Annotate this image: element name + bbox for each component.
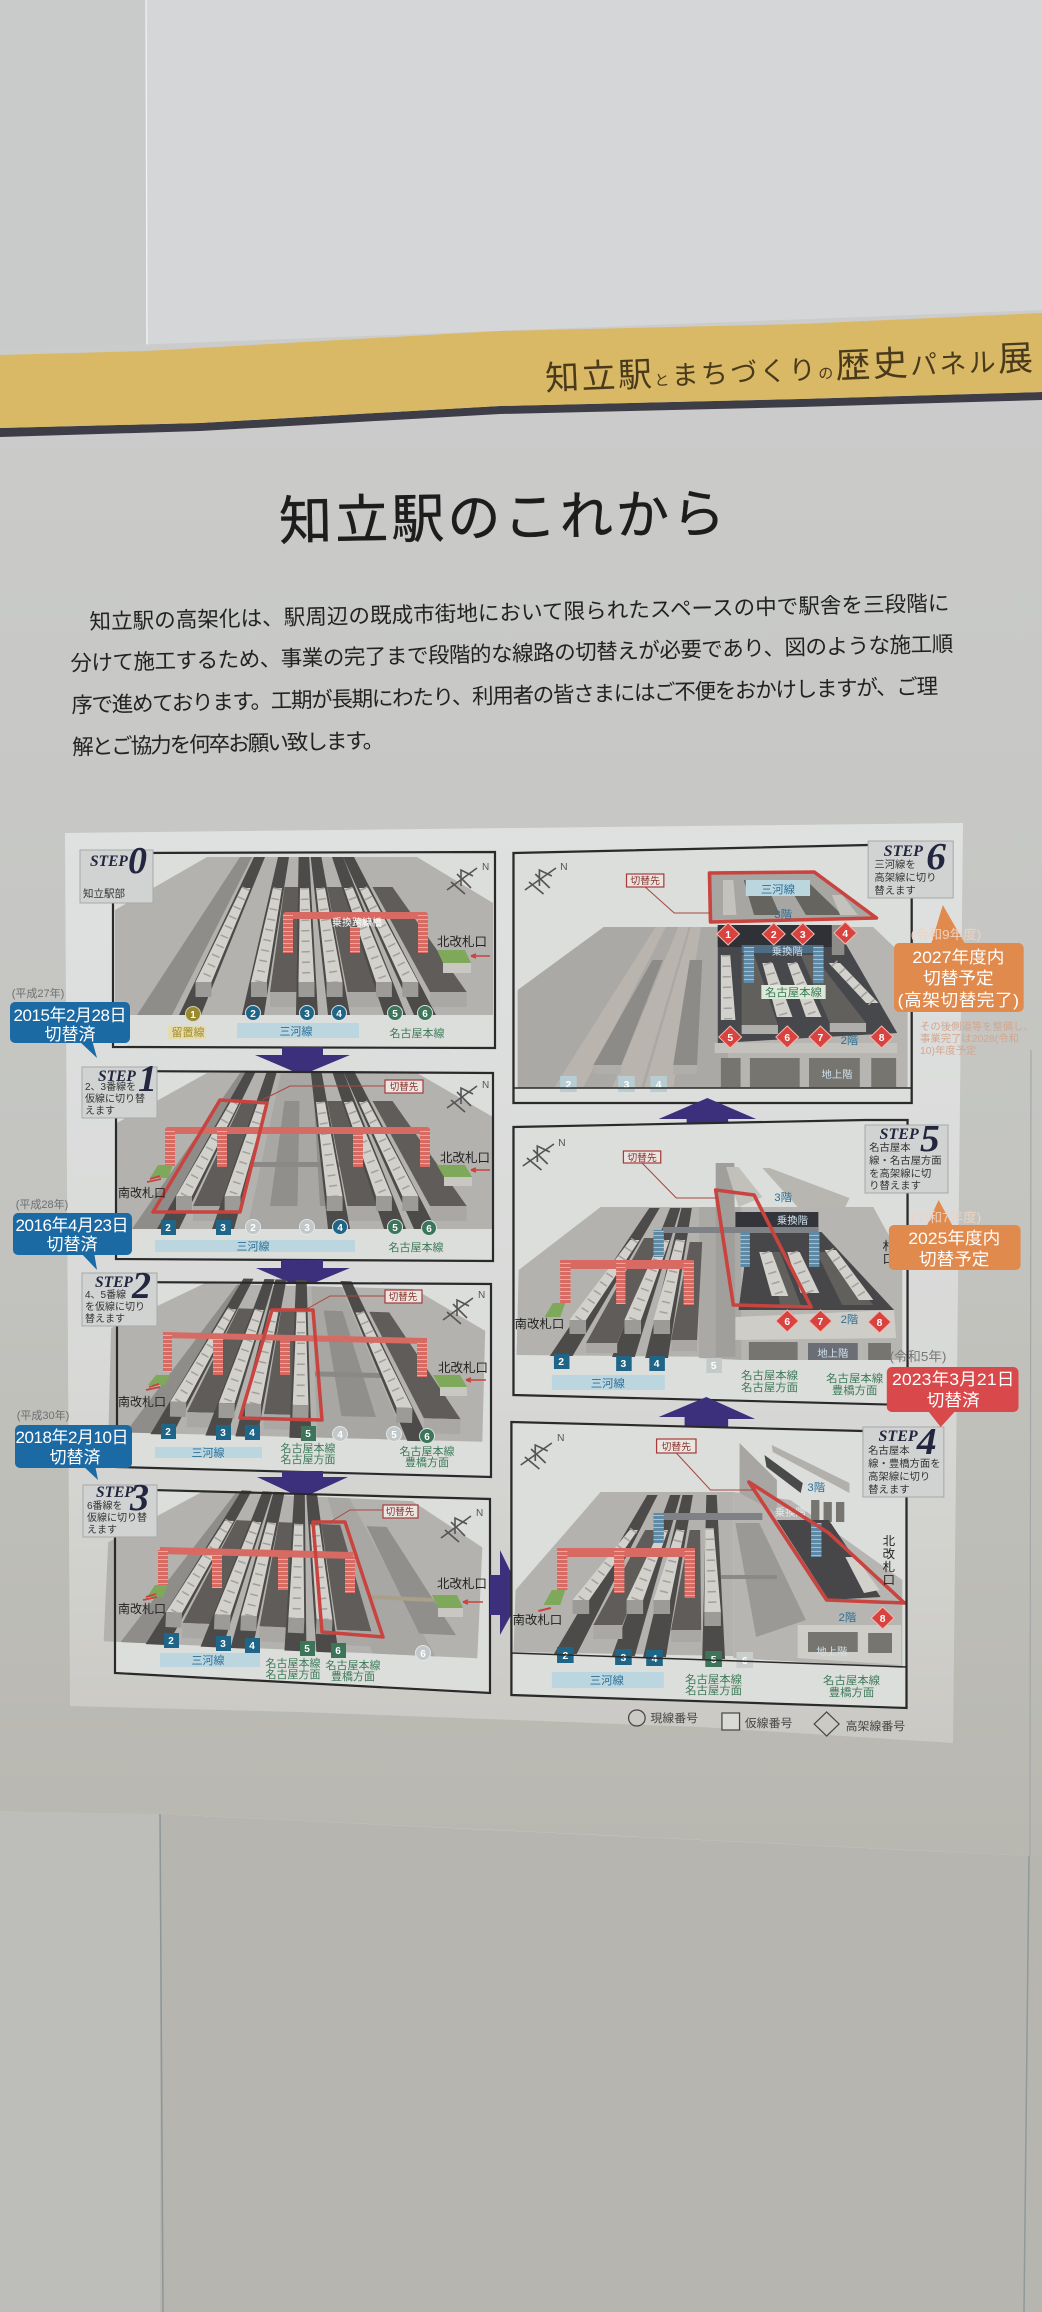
line names: 豊橋方面 xyxy=(829,1685,874,1699)
compass xyxy=(443,1290,485,1324)
line numbers xyxy=(164,1633,430,1660)
body text: 知立駅の高架化は、駅周辺の既成市街地において限られたスペースの中で駅舎を三段階に xyxy=(89,591,950,634)
target callout: 切替先 xyxy=(390,1081,419,1093)
step label: 高架線に切り xyxy=(868,1470,930,1483)
line names: 名古屋方面 xyxy=(280,1452,336,1466)
elevated numbers and floors: 6 xyxy=(784,1317,790,1328)
arrow: step 4 to 5 xyxy=(659,1397,755,1427)
arrow: step 1 to 2 xyxy=(256,1260,350,1288)
floor labels xyxy=(821,1034,858,1081)
line names: 三河線 xyxy=(280,1025,312,1038)
line numbers xyxy=(557,1647,753,1668)
line numbers: 5 xyxy=(305,1429,311,1440)
line numbers: 2 xyxy=(165,1427,171,1438)
step label: 三河線を xyxy=(874,858,916,871)
line numbers: 6 xyxy=(424,1432,430,1443)
elevated structure xyxy=(740,1443,901,1665)
compass xyxy=(523,1138,566,1170)
step label: STEP xyxy=(880,1126,919,1143)
target highlight box xyxy=(153,1100,267,1212)
step label: 仮線に切り替 xyxy=(85,1092,145,1105)
ground and tracks xyxy=(517,1207,902,1360)
line names: 豊橋方面 xyxy=(832,1383,877,1397)
line numbers: 2 xyxy=(250,1223,256,1234)
target highlight box xyxy=(313,1522,383,1637)
gates: 北改札口 xyxy=(440,1150,490,1165)
step label xyxy=(80,840,153,903)
callout: 2018 xyxy=(15,1408,132,1480)
white diagram sheet xyxy=(65,823,963,1743)
line numbers: 4 xyxy=(654,1359,660,1370)
overpass xyxy=(165,1127,430,1167)
line numbers: 2 xyxy=(562,1651,569,1662)
target callout xyxy=(627,874,711,913)
panel: STEP 2 xyxy=(82,1265,491,1477)
step label xyxy=(82,1058,157,1118)
line names: 名古屋本線 xyxy=(388,1240,444,1254)
elevated line numbers: 1 xyxy=(725,930,731,941)
north gate: 北改札口 xyxy=(437,934,487,949)
crossing walkway xyxy=(370,1595,433,1602)
step label: り替えます xyxy=(869,1179,921,1192)
old track scene xyxy=(518,927,908,1088)
step label: 替えます xyxy=(85,1312,125,1325)
overpass: 乗換跨線橋 xyxy=(332,916,382,929)
arrow: step 0 to 1 xyxy=(255,1047,350,1075)
panel: STEP 4 xyxy=(511,1422,944,1708)
compass: N xyxy=(478,1290,485,1301)
body text: 分けて施工するため、事業の完了まで段階的な線路の切替えが必要であり、図のような施工順 xyxy=(70,632,953,676)
elevated numbers and floors xyxy=(816,1607,894,1658)
gates: 北改札口 xyxy=(437,1576,487,1591)
callout: 2027: 切替予定 xyxy=(923,968,994,988)
line names xyxy=(160,1653,380,1683)
line names: 名古屋本線 xyxy=(685,1672,742,1686)
line name: Nagoya main: 名古屋本線 xyxy=(765,985,822,999)
step label: 0 xyxy=(128,840,147,882)
gates: 口 xyxy=(883,1573,895,1587)
arrow: step 3 to 4 xyxy=(490,1550,522,1635)
banner xyxy=(0,313,1042,437)
elevated numbers and floors: 地上階 xyxy=(816,1645,847,1658)
track scene xyxy=(104,1484,484,1659)
panel: STEP 6 xyxy=(513,837,953,1103)
line numbers xyxy=(554,1354,722,1373)
floor labels: 地上階 xyxy=(821,1068,853,1081)
target highlight box xyxy=(240,1310,322,1420)
callout: 2016: (平成28年) xyxy=(16,1197,68,1211)
target callout: 切替先 xyxy=(627,1152,657,1164)
transfer concourse and stairs: 3階 xyxy=(807,1481,825,1494)
transfer concourse and stairs: 3階 xyxy=(774,1191,792,1204)
body text: 解とご協力を何卒お願い致します。 xyxy=(72,729,384,760)
step label: 2 xyxy=(131,1265,151,1307)
target callout: 切替先 xyxy=(389,1291,418,1303)
line numbers: 2 xyxy=(165,1223,171,1234)
step label xyxy=(865,1119,948,1193)
line names xyxy=(155,1441,454,1469)
callout: 2015 xyxy=(10,986,130,1058)
faded line numbers xyxy=(560,1076,667,1092)
compass xyxy=(525,862,568,894)
gates: 北改札口 xyxy=(438,1360,488,1375)
elevated numbers and floors: 2階 xyxy=(841,1313,858,1326)
overpass xyxy=(163,1332,427,1377)
overpass xyxy=(283,912,428,953)
line numbers: 3 xyxy=(304,1223,310,1234)
callout: 2016: 切替済 xyxy=(46,1235,98,1254)
callout: 2027: 事業完了は2028(令和 xyxy=(920,1032,1019,1045)
callout: 2027 xyxy=(894,905,1034,1057)
line numbers: 5 xyxy=(304,1644,310,1655)
target callout: 切替先 xyxy=(630,875,660,887)
line numbers: 5 xyxy=(391,1430,397,1441)
track scene xyxy=(115,857,493,1015)
step label xyxy=(863,1422,944,1497)
line names: 三河線 xyxy=(192,1654,224,1667)
line numbers: 6 xyxy=(426,1224,432,1235)
target highlight box xyxy=(716,1190,811,1307)
line numbers: 6 xyxy=(420,1649,426,1660)
target highlight box xyxy=(749,1482,904,1603)
step label: えます xyxy=(85,1105,115,1117)
body text: 序で進めております。工期が長期にわたり、利用者の皆さまにはご不便をおかけしますが、ご理 xyxy=(71,675,938,718)
step label: STEP xyxy=(96,1484,134,1501)
elevated station structure xyxy=(715,925,897,1087)
compass xyxy=(441,1508,483,1542)
callout: 2025: 2025年度内 xyxy=(908,1228,1000,1248)
step label: 4 xyxy=(916,1422,937,1463)
step label: 2、3番線を xyxy=(85,1080,136,1093)
compass xyxy=(447,1080,489,1112)
line numbers: 3 xyxy=(621,1653,627,1664)
gates xyxy=(515,1239,895,1331)
line names: 三河線 xyxy=(591,1377,625,1390)
gates: 南改札口 xyxy=(515,1316,564,1331)
arrow: step 5 to 6 xyxy=(659,1098,756,1127)
gates xyxy=(512,1534,895,1627)
overpass xyxy=(560,1260,694,1305)
elevated numbers and floors: 2階 xyxy=(839,1611,856,1624)
callout: 2027: (令和9年度) xyxy=(911,927,981,942)
step label: えます xyxy=(87,1524,117,1536)
line numbers: 2 xyxy=(168,1636,174,1647)
callout: 2015: 切替済 xyxy=(44,1025,96,1044)
line numbers xyxy=(161,1424,434,1444)
compass xyxy=(447,862,489,894)
step label: 6番線を xyxy=(87,1499,123,1512)
elevated numbers and floors: 7 xyxy=(818,1317,824,1328)
gates xyxy=(118,1150,490,1200)
track scene xyxy=(108,1275,486,1443)
line names: 名古屋方面 xyxy=(266,1667,320,1681)
step label xyxy=(868,837,953,898)
target callout: 切替先 xyxy=(662,1441,691,1453)
gates: 南改札口 xyxy=(118,1601,166,1616)
callout: 2023: 切替済 xyxy=(927,1390,980,1410)
third floor: 3階 xyxy=(774,908,792,921)
legend: 高架線番号 xyxy=(846,1720,905,1733)
callout: 2023: (令和5年) xyxy=(889,1349,946,1364)
line names xyxy=(168,1023,444,1040)
line names: 名古屋本線 xyxy=(326,1658,380,1672)
callout: 2018: 2018年2月10日 xyxy=(16,1428,128,1447)
target callout xyxy=(657,1439,754,1490)
target highlight box xyxy=(709,872,876,922)
target callout xyxy=(623,1151,718,1198)
line numbers: 6 xyxy=(335,1646,341,1657)
target callout xyxy=(330,1505,418,1522)
step label: 仮線に切り替 xyxy=(87,1511,147,1524)
line names xyxy=(155,1240,444,1254)
legend: 仮線番号 xyxy=(745,1717,793,1730)
line names: 留置線 xyxy=(172,1026,204,1039)
line names: 名古屋本線 xyxy=(280,1441,336,1455)
line numbers: 3 xyxy=(220,1639,226,1650)
line names: 三河線 xyxy=(590,1674,624,1687)
step label: 6 xyxy=(926,837,947,878)
compass: N xyxy=(482,1080,489,1091)
step label xyxy=(83,1477,157,1537)
callout: 2018: 切替済 xyxy=(50,1448,100,1467)
line numbers: 2 xyxy=(250,1009,256,1020)
line numbers xyxy=(186,1006,432,1022)
elevated line numbers: 3 xyxy=(800,930,806,941)
compass: N xyxy=(476,1508,483,1519)
elevated line numbers: 6 xyxy=(784,1033,790,1044)
gates xyxy=(118,1576,487,1617)
line names xyxy=(552,1672,880,1699)
line names: 三河線 xyxy=(192,1446,224,1460)
line names: 名古屋本線 xyxy=(390,1026,444,1040)
step label: 知立駅部 xyxy=(83,887,125,900)
callout: 2015: (平成27年) xyxy=(12,986,64,1000)
compass: N xyxy=(560,862,568,873)
line numbers: 3 xyxy=(220,1223,226,1234)
line numbers: 3 xyxy=(304,1009,310,1020)
compass: N xyxy=(558,1138,566,1149)
line numbers: 5 xyxy=(711,1361,717,1372)
overpass xyxy=(557,1548,695,1598)
line numbers: 4 xyxy=(249,1641,255,1652)
transfer floor stairs xyxy=(742,945,824,983)
step label: STEP xyxy=(95,1274,133,1291)
elevated line numbers xyxy=(717,922,893,1048)
line numbers: 4 xyxy=(337,1223,343,1234)
step label: STEP xyxy=(90,853,128,870)
panel: STEP 3 xyxy=(83,1477,490,1693)
title: 知立駅のこれから xyxy=(279,485,726,552)
elevated line numbers: 2 xyxy=(771,930,777,941)
line numbers: 1 xyxy=(190,1010,196,1021)
step label: 4、5番線 xyxy=(85,1288,126,1301)
elevated structure xyxy=(716,1163,896,1360)
line numbers: 5 xyxy=(711,1655,717,1666)
line names: 名古屋方面 xyxy=(685,1683,742,1697)
callout: 2023 xyxy=(887,1349,1018,1427)
third floor xyxy=(711,872,876,922)
compass xyxy=(521,1433,565,1469)
gates: 改 xyxy=(883,1546,895,1561)
gates: 南改札口 xyxy=(512,1612,562,1627)
body text xyxy=(69,591,955,760)
step label: STEP xyxy=(879,1428,918,1445)
line numbers: 4 xyxy=(652,1654,658,1665)
arrow: step 2 to 3 xyxy=(257,1471,348,1498)
callout: 2016: 2016年4月23日 xyxy=(16,1216,128,1235)
gates: 北 xyxy=(883,1534,895,1548)
line numbers: 5 xyxy=(392,1223,398,1234)
line numbers: 3 xyxy=(621,1359,627,1370)
line numbers: 4 xyxy=(337,1430,343,1441)
gates: 南改札口 xyxy=(118,1185,166,1200)
overpass xyxy=(158,1547,355,1593)
elevated numbers and floors: 8 xyxy=(880,1614,886,1625)
line numbers: 6 xyxy=(422,1009,428,1020)
callout: 2018: (平成30年) xyxy=(17,1408,69,1422)
transfer concourse and stairs: 乗換階 xyxy=(775,1507,806,1519)
line names: 名古屋本線 xyxy=(826,1371,883,1385)
step label: を仮線に切り xyxy=(85,1300,145,1313)
step label: 線・豊橋方面を xyxy=(868,1457,941,1470)
lower wall xyxy=(0,1811,1042,2312)
elevated numbers and floors: 地上階 xyxy=(817,1347,848,1360)
step label: 名古屋本 xyxy=(869,1141,911,1154)
step label: 名古屋本 xyxy=(868,1444,910,1457)
line numbers: 6 xyxy=(742,1656,748,1667)
poster board xyxy=(0,310,1042,1856)
line numbers: 4 xyxy=(249,1428,255,1439)
step label: 1 xyxy=(138,1058,157,1100)
gates: 札 xyxy=(883,1560,895,1574)
line numbers: 3 xyxy=(220,1428,226,1439)
transfer floor stairs: 乗換階 xyxy=(772,946,803,958)
elevated line numbers: 5 xyxy=(727,1033,733,1044)
panel: STEP 1 xyxy=(82,1058,493,1261)
callout: 2025: 切替予定 xyxy=(919,1249,989,1269)
line names: 名古屋本線 xyxy=(266,1656,320,1670)
faded line numbers: 4 xyxy=(656,1080,662,1091)
track scene xyxy=(115,1071,493,1229)
target callout xyxy=(305,1290,422,1310)
line names: 豊橋方面 xyxy=(405,1455,449,1469)
line names: 豊橋方面 xyxy=(331,1669,375,1683)
elevated numbers and floors: 8 xyxy=(877,1318,883,1329)
callout: 2025 xyxy=(889,1200,1021,1270)
step label: を高架線に切 xyxy=(869,1167,931,1180)
callout: 2016 xyxy=(13,1197,132,1270)
step label: 線・名古屋方面 xyxy=(869,1154,942,1167)
faded line numbers: 3 xyxy=(624,1080,630,1091)
callout: 2025: (令和7年度) xyxy=(911,1210,981,1225)
banner title: 知立駅とまちづくりの歴史パネル展 xyxy=(544,339,1034,398)
step label: 3 xyxy=(129,1477,149,1519)
callout: 2027: 2027年度内 xyxy=(912,947,1004,967)
panel: STEP 5 xyxy=(513,1119,948,1405)
callout: 2027: 10)年度予定 xyxy=(920,1044,976,1057)
elevated numbers and floors xyxy=(776,1310,891,1360)
gates: 南改札口 xyxy=(118,1394,166,1409)
gates xyxy=(118,1360,488,1409)
line names: 三河線 xyxy=(236,1240,270,1253)
target callout xyxy=(262,1080,423,1100)
north gate xyxy=(437,934,490,973)
elevated line numbers: 4 xyxy=(842,929,849,940)
panel: STEP 0 xyxy=(80,840,495,1048)
right column xyxy=(511,837,1034,1736)
transfer concourse and stairs xyxy=(653,1481,825,1557)
ground and tracks xyxy=(513,1492,902,1668)
line names: 名古屋方面 xyxy=(741,1380,798,1394)
target callout: 切替先 xyxy=(386,1506,415,1518)
line numbers: 2 xyxy=(558,1357,564,1368)
line numbers: 5 xyxy=(392,1009,398,1020)
transfer concourse and stairs xyxy=(653,1191,819,1267)
faded line numbers: 2 xyxy=(566,1080,572,1091)
callout: 2027: その後側道等を整備し、 xyxy=(920,1020,1034,1033)
compass: N xyxy=(482,862,489,873)
line numbers: 4 xyxy=(336,1009,342,1020)
line names xyxy=(552,1368,883,1397)
callout: 2027: (高架切替完了) xyxy=(898,990,1019,1010)
gates: 札 xyxy=(883,1239,895,1253)
floor labels: 2階 xyxy=(841,1034,858,1047)
line numbers xyxy=(161,1220,436,1236)
line names: 名古屋本線 xyxy=(400,1444,454,1458)
elevated line numbers: 7 xyxy=(818,1033,824,1044)
step label: STEP xyxy=(884,843,923,860)
legend: 現線番号 xyxy=(650,1712,698,1725)
step label: 高架線に切り xyxy=(874,871,937,884)
compass: N xyxy=(557,1433,565,1444)
third floor: 三河線 xyxy=(761,883,795,896)
line names: 名古屋本線 xyxy=(823,1673,880,1687)
gates: 口 xyxy=(883,1252,895,1266)
step label: 替えます xyxy=(874,884,916,897)
step label xyxy=(82,1265,157,1326)
legend xyxy=(629,1710,905,1736)
elevated line numbers: 8 xyxy=(879,1033,885,1044)
line names: 名古屋本線 xyxy=(741,1368,798,1382)
step label: STEP xyxy=(98,1068,136,1085)
callout: 2015: 2015年2月28日 xyxy=(14,1006,126,1025)
step label: 5 xyxy=(920,1119,940,1160)
callout: 2023: 2023年3月21日 xyxy=(892,1369,1014,1389)
step label: 替えます xyxy=(868,1483,910,1496)
transfer concourse and stairs: 乗換階 xyxy=(777,1215,808,1227)
